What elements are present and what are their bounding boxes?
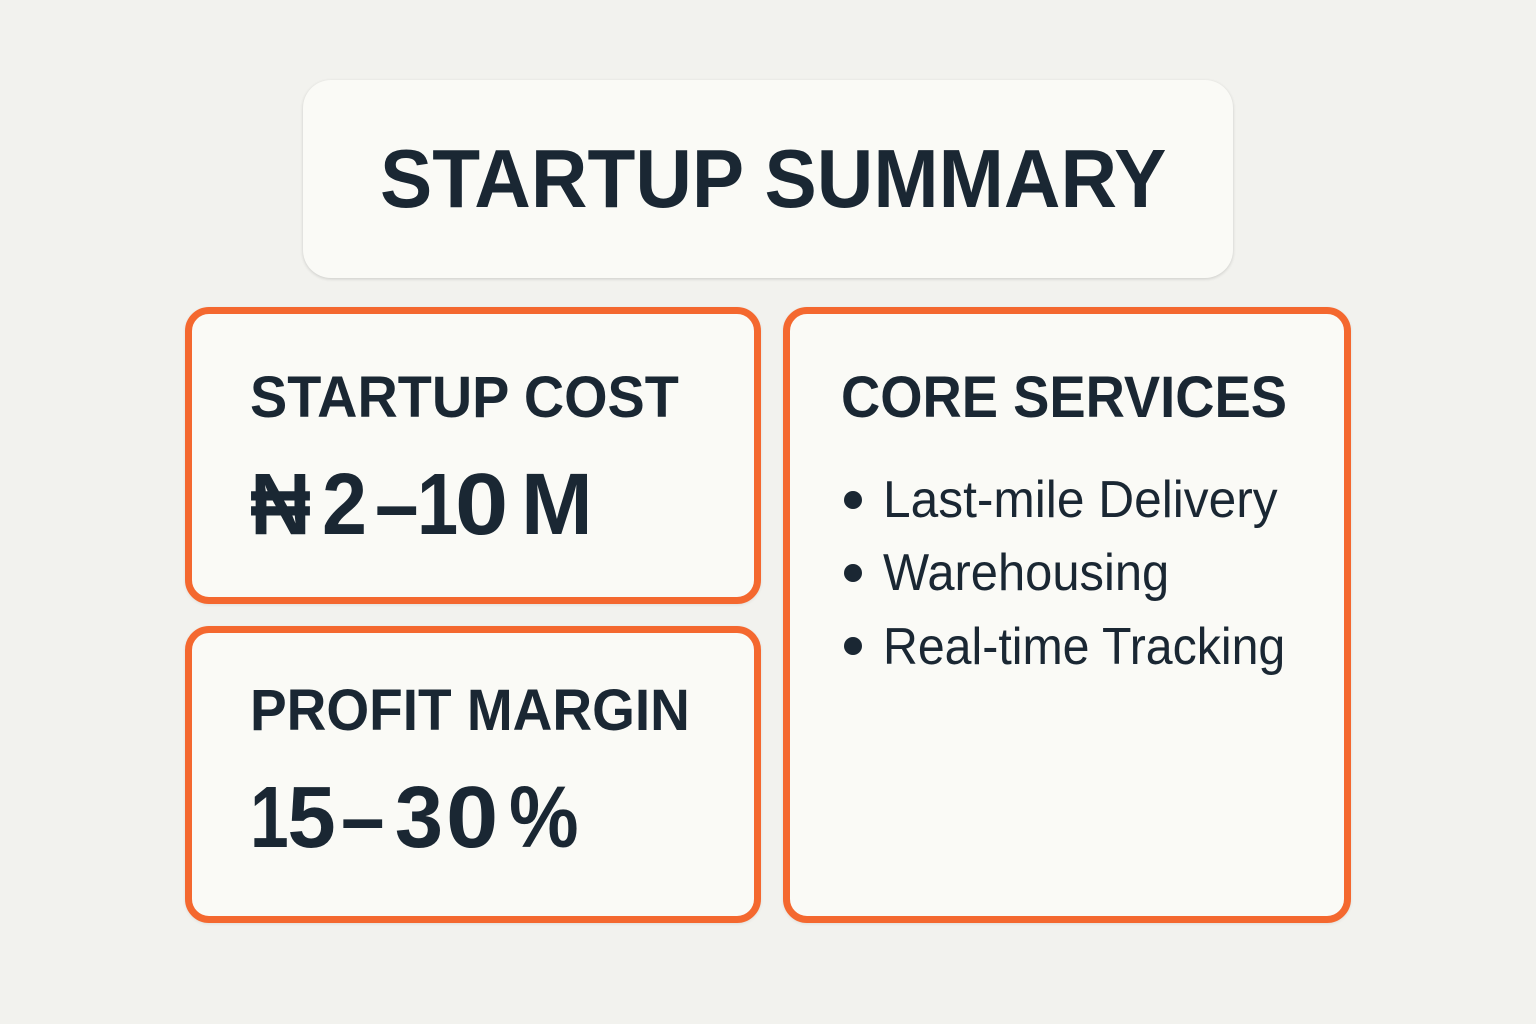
value: startup cost: M [521, 456, 593, 553]
value: profit margin: % [509, 769, 579, 866]
value: startup cost: 0 [455, 456, 508, 553]
value: profit margin: 1 [250, 769, 280, 866]
heading: core services: CORE SERVICES [841, 365, 1287, 430]
value: profit margin: 0 [446, 769, 498, 866]
value: profit margin [250, 769, 579, 866]
value: startup cost: – [375, 456, 413, 553]
title: STARTUP SUMMARY [380, 132, 1166, 225]
value: profit margin: 3 [395, 769, 446, 866]
value: profit margin: 5 [287, 769, 341, 866]
list item: real-time tracking: Real-time Tracking [883, 618, 1285, 676]
panel: profit margin [185, 626, 761, 923]
title panel [303, 80, 1233, 278]
value: startup cost: 2 [322, 456, 371, 553]
value: startup cost [250, 456, 593, 553]
panel: core services [783, 307, 1351, 923]
value: profit margin: – [341, 769, 389, 866]
heading: startup cost: STARTUP COST [250, 365, 679, 430]
panel: startup cost [185, 307, 761, 604]
list item: warehousing: Warehousing [883, 544, 1169, 602]
value: startup cost: 1 [417, 456, 449, 553]
list item: last-mile delivery: Last-mile Delivery [883, 471, 1278, 529]
heading: profit margin: PROFIT MARGIN [250, 678, 690, 743]
value: startup cost: ₦ [250, 456, 320, 553]
list: services [844, 471, 1285, 676]
